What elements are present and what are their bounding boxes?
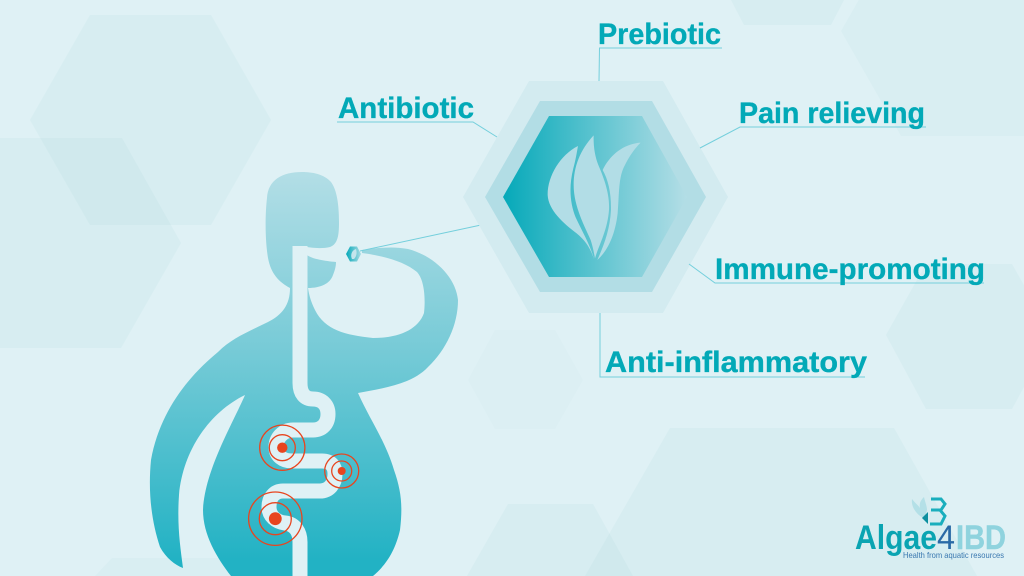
logo wordmark IBD: IBD <box>956 519 1006 557</box>
digestive tract <box>269 246 335 576</box>
label: Anti-inflammatory: Anti-inflammatory <box>605 346 867 379</box>
human body silhouette with digestive tract <box>150 172 458 576</box>
logo tagline: Health from aquatic resources <box>903 550 1004 560</box>
body silhouette <box>150 172 458 576</box>
label: Immune-promoting: Immune-promoting <box>715 253 985 286</box>
inner gradient hexagon <box>503 116 687 277</box>
label: Pain relieving <box>700 97 926 148</box>
icon: small algae capsule <box>346 246 361 262</box>
label: Anti-inflammatory <box>600 313 867 379</box>
inflammation target 3 <box>249 492 302 545</box>
label: Prebiotic: Prebiotic <box>598 18 721 51</box>
connector: hexagon to capsule <box>360 225 481 251</box>
middle hexagon <box>485 101 706 292</box>
label: Prebiotic <box>598 18 722 81</box>
hexagon emblem <box>463 81 728 313</box>
inflammation target 1 <box>260 425 305 470</box>
logo wordmark 4: 4 <box>937 519 955 557</box>
icon: algae leaves <box>548 135 641 260</box>
inflammation target 2 <box>325 454 359 488</box>
outer hexagon <box>463 81 728 313</box>
logo wordmark Algae: Algae <box>855 519 937 557</box>
logo: Algae4IBD <box>855 497 1006 560</box>
logo icon <box>912 497 945 524</box>
label: Pain relieving: Pain relieving <box>739 97 925 130</box>
label: Antibiotic <box>337 92 497 137</box>
label: Antibiotic: Antibiotic <box>338 92 474 125</box>
